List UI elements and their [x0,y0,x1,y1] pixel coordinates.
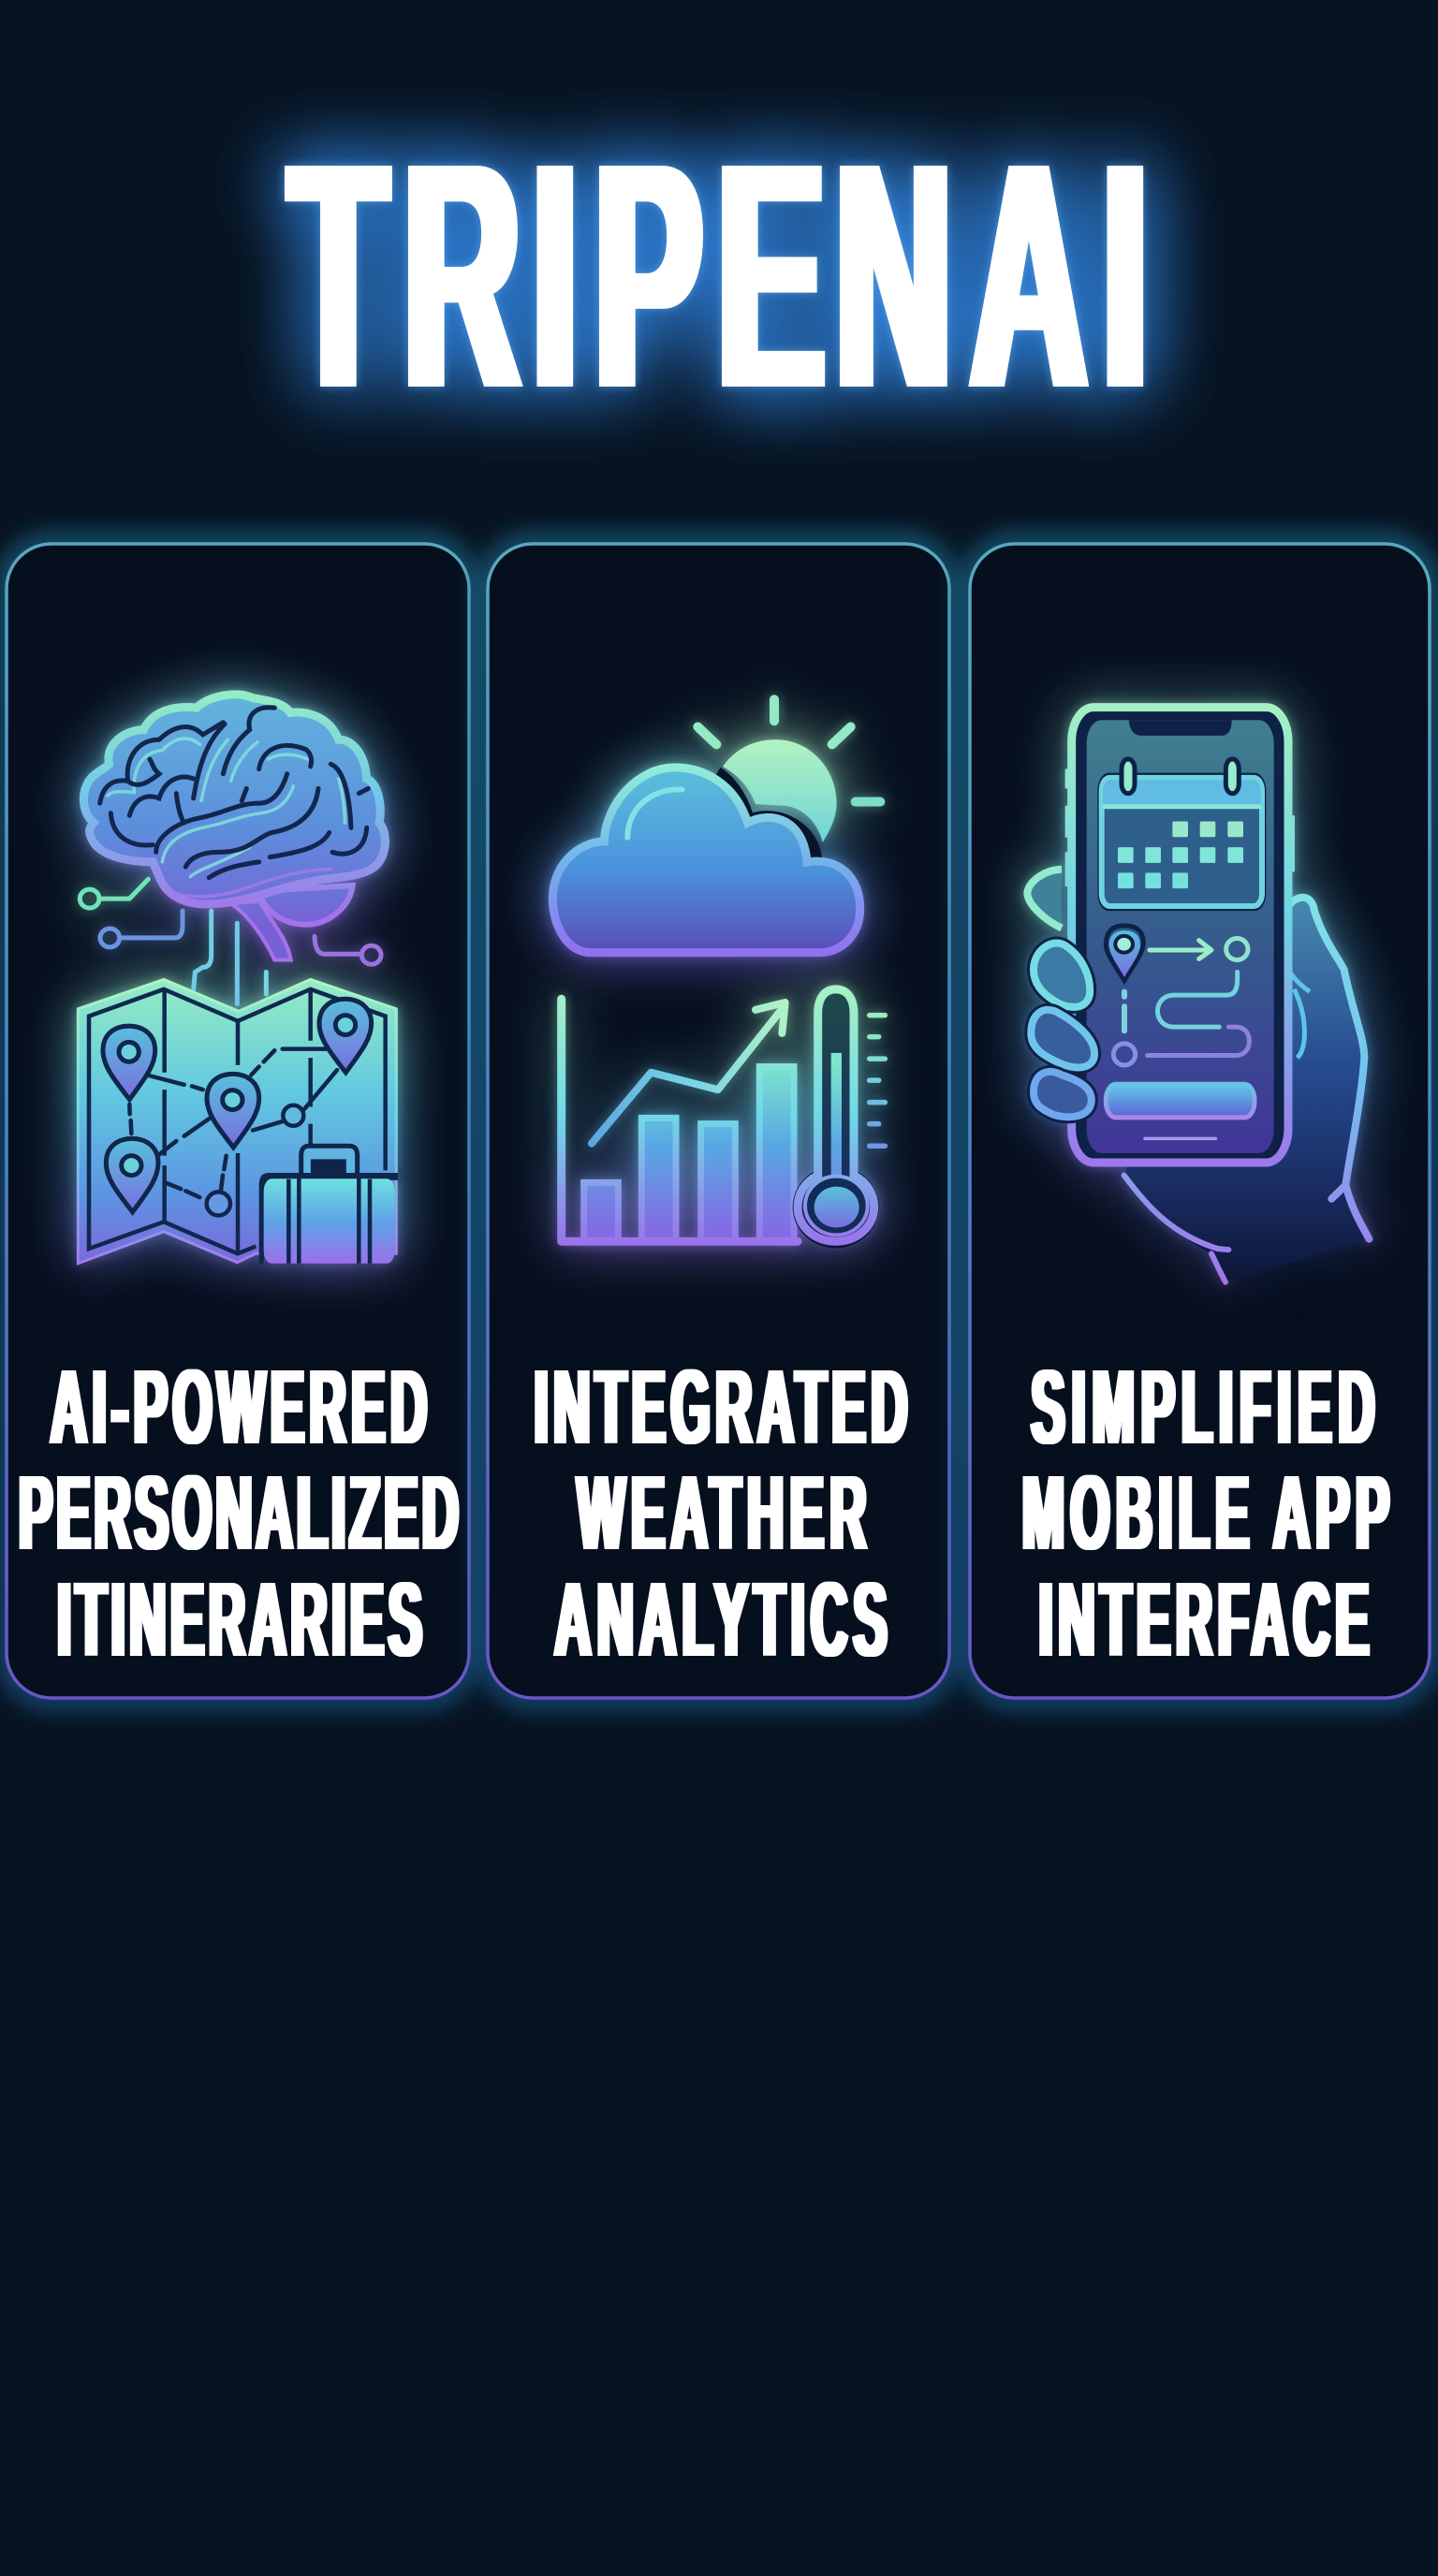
icon part: brain stem and cerebellum [231,886,353,959]
icon part: sun [723,739,837,842]
panel: AI-powered personalized itineraries [7,544,469,1698]
icon part: map pins [103,999,372,1212]
label: integrated weather analytics [535,1348,907,1678]
icon part: sun rays [697,699,880,802]
icon part: bar chart [562,999,798,1241]
label: AI-powered personalized itineraries: PERSONALIZED [19,1454,459,1572]
icon part: circuit traces [80,879,381,1004]
panel: simplified mobile app interface [970,544,1430,1698]
icon part: hand palm [1124,898,1369,1282]
icon: weather cloud and chart with thermometer [552,699,885,1249]
icon part: suitcase [259,1146,398,1264]
panel: integrated weather analytics [488,544,949,1698]
label: AI-powered personalized itineraries: ITINERARIES [57,1560,422,1678]
label: AI-powered personalized itineraries [19,1348,459,1678]
icon part: app button [1106,1084,1255,1118]
icon part: cloud [552,768,860,953]
label: simplified mobile app interface: SIMPLIFIED [1031,1348,1375,1466]
label: integrated weather analytics: WEATHER [577,1454,867,1572]
icon part: fingers [1027,870,1094,1117]
label: integrated weather analytics: ANALYTICS [554,1560,888,1678]
label: simplified mobile app interface [1022,1348,1389,1678]
icon: brain over map with suitcase [78,695,398,1264]
label: simplified mobile app interface: INTERFACE [1039,1560,1369,1678]
icon part: calendar [1097,759,1266,911]
label: simplified mobile app interface: MOBILE APP [1022,1454,1389,1572]
label: AI-powered personalized itineraries: AI-POWERED [51,1348,427,1466]
icon part: folded map [78,979,396,1264]
icon part: thermometer [793,989,879,1249]
icon part: route on screen [1106,926,1249,1065]
title: TRIPENAI [289,97,1148,455]
icon part: map routes [129,1049,337,1215]
icon part: phone body [1068,708,1292,1163]
icon: hand holding phone [1027,708,1369,1282]
label: integrated weather analytics: INTEGRATED [535,1348,907,1466]
icon part: home indicator [1145,1137,1215,1140]
icon part: thermometer ticks [870,1016,885,1146]
icon part: brain [83,695,385,904]
